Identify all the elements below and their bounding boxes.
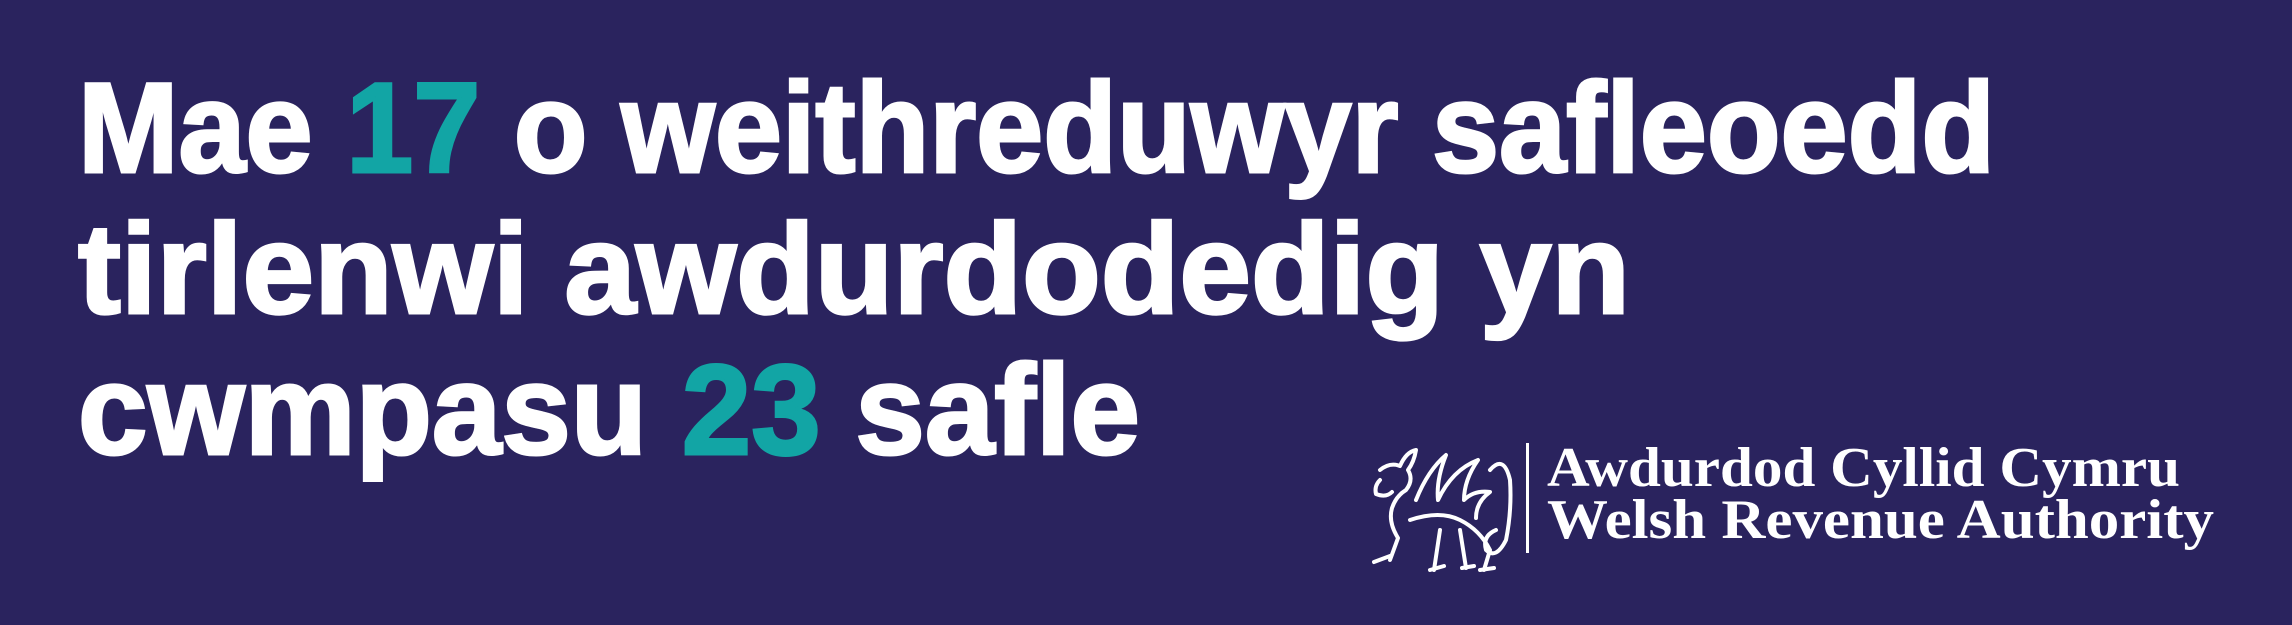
icon: dragon — [1374, 450, 1510, 570]
logo — [1374, 437, 2214, 570]
logo text — [1547, 437, 2214, 551]
title: Mae 17 o weithreduwyr safleoedd — [78, 57, 1995, 200]
divider — [1526, 443, 1529, 553]
title: tirlenwi awdurdodedig yn — [78, 198, 1630, 341]
title: cwmpasu 23 safle — [78, 339, 1140, 482]
title — [78, 57, 1995, 482]
logo text: Welsh Revenue Authority — [1547, 489, 2214, 551]
logo text: Awdurdod Cyllid Cymru — [1547, 437, 2180, 499]
